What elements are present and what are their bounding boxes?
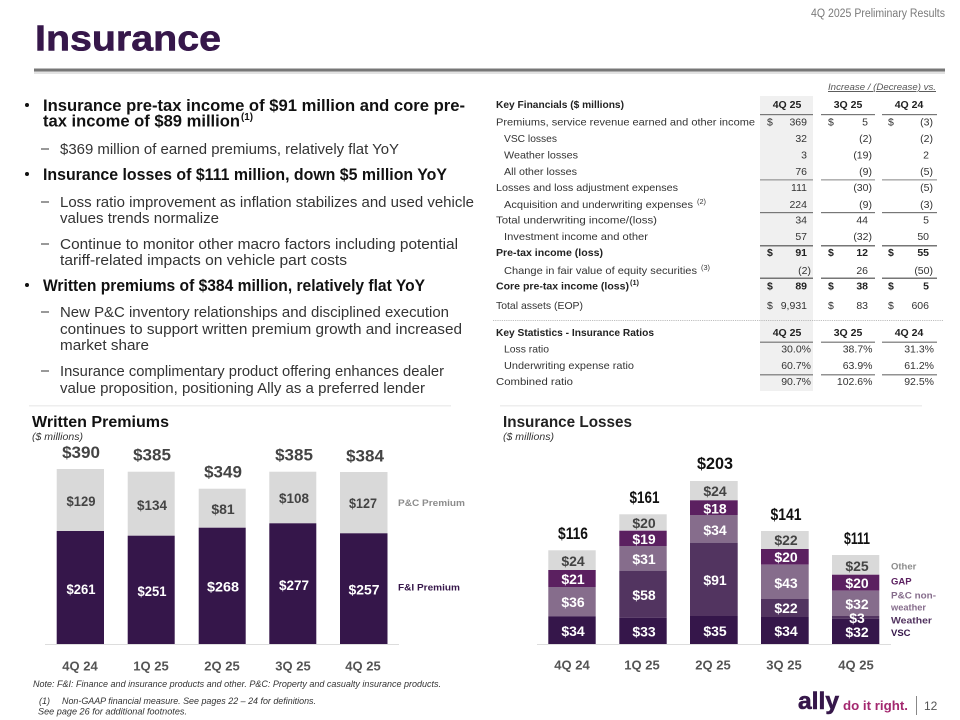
totals: $116 — [558, 525, 588, 543]
table: 4Q 24 change values: (50) — [914, 265, 933, 277]
bars: weather — [619, 543, 879, 619]
table: key financials header: 4Q 24 — [895, 99, 923, 111]
table: insurance ratios: 92.5% — [904, 376, 934, 388]
table: row labels: (1) — [630, 278, 639, 287]
legend labels: Weather — [891, 616, 932, 626]
totals: $349 — [204, 462, 242, 482]
page number: 12 — [924, 699, 938, 713]
table: 3Q 25 change values: 5 — [862, 116, 868, 128]
F&I values: $251 — [138, 583, 167, 599]
footnotes: Note: F&I: Finance and insurance products and other. P&C: Property and casualty insurance products. — [33, 679, 441, 689]
totals: $111 — [844, 530, 870, 548]
table: row labels: Acquisition and underwriting expenses — [504, 199, 693, 211]
table: key statistics header: 4Q 25 — [773, 327, 801, 339]
segment values: $34 — [774, 623, 798, 639]
bullet: pre-tax income — [25, 96, 465, 130]
x axis labels: 3Q 25 — [275, 658, 311, 674]
table: 4Q 25 values: 224 — [789, 199, 807, 211]
x axis labels: 1Q 25 — [133, 658, 169, 674]
table: row labels: (3) — [701, 265, 710, 272]
legend labels: P&C non- — [891, 590, 936, 602]
P&C values: $108 — [279, 490, 309, 506]
table: dollar signs: $ — [767, 300, 773, 312]
logo: ally do it right — [798, 688, 908, 715]
table: 4Q 25 values — [781, 116, 811, 312]
table: row labels — [496, 116, 755, 312]
sub-bullet: loss ratio: values trends normalize — [60, 211, 219, 227]
F&I values: $268 — [207, 579, 239, 595]
legend labels — [398, 498, 465, 594]
table: dollar signs: $ — [888, 280, 894, 292]
table: key financials header — [496, 99, 923, 111]
table: key statistics header: 4Q 24 — [895, 327, 923, 339]
table: dollar signs: $ — [767, 116, 773, 128]
segment values: $21 — [561, 571, 585, 587]
table: 4Q 25 values: 34 — [795, 214, 807, 226]
x axis labels: 2Q 25 — [695, 658, 731, 672]
sub-bullet: macro factors: tariff-related impacts on vehicle part costs — [60, 253, 347, 269]
table: 3Q 25 change values: 83 — [856, 300, 868, 312]
table: row labels: Losses and loss adjustment expenses — [496, 182, 678, 194]
table: row labels: Total underwriting income/(loss) — [496, 214, 657, 226]
bullet: pre-tax income: (1) — [241, 111, 253, 123]
other values: $25 — [845, 558, 869, 574]
segment values — [561, 500, 869, 640]
x axis labels: 4Q 24 — [554, 658, 590, 672]
segment values: $31 — [632, 551, 656, 567]
x axis labels: 4Q 24 — [62, 658, 98, 674]
table: insurance ratios: Loss ratio — [504, 344, 549, 356]
totals — [62, 443, 384, 482]
table: 4Q 25 values: 76 — [795, 166, 807, 178]
sub-bullet: P&C inventory: continues to support written premium growth and increased — [60, 322, 462, 338]
totals: $203 — [697, 455, 733, 473]
P&C values: $129 — [66, 493, 96, 509]
sub-bullet: macro factors: Continue to monitor other macro factors including potential — [60, 237, 458, 253]
P&C values: $81 — [211, 501, 235, 517]
segment values: $34 — [703, 522, 727, 538]
legend labels: weather — [890, 602, 926, 614]
bullet: pre-tax income: Insurance pre-tax income of $91 million and core pre- — [43, 96, 465, 115]
segment values: $33 — [632, 624, 656, 640]
segment values: $34 — [561, 623, 585, 639]
table: 4Q 24 change values: (3) — [920, 116, 933, 128]
footnotes: See page 26 for additional footnotes. — [38, 706, 187, 716]
footnotes: (1) — [39, 696, 50, 706]
segment values: $22 — [774, 600, 798, 616]
table: dollar signs: $ — [767, 280, 773, 292]
table: 4Q 25 values: 369 — [789, 116, 807, 128]
F&I values — [66, 577, 380, 599]
table: key statistics header: 3Q 25 — [834, 327, 862, 339]
table: 4Q 25 values: 9,931 — [781, 300, 807, 312]
panel: key bullet points — [25, 96, 474, 397]
table: 4Q 24 change values — [911, 116, 933, 312]
totals: $390 — [62, 443, 100, 462]
table: dollar signs: $ — [888, 116, 894, 128]
table: dollar signs: $ — [828, 280, 834, 292]
table: row labels: All other losses — [504, 166, 577, 178]
bars: GAP — [548, 500, 879, 591]
table: insurance ratios: 38.7% — [843, 344, 872, 356]
table: dollar signs: $ — [888, 247, 894, 259]
legend labels — [890, 562, 936, 639]
row lines — [760, 114, 937, 375]
footnotes — [33, 679, 441, 716]
table: insurance ratios: 102.6% — [837, 376, 872, 388]
table: dollar signs: $ — [828, 300, 834, 312]
page number — [916, 696, 938, 715]
unit note: ($ millions) — [32, 431, 83, 443]
table: dollar signs — [767, 116, 894, 312]
table: 4Q 25 values: 32 — [795, 133, 807, 145]
table: key financials header: 3Q 25 — [834, 99, 862, 111]
table: 3Q 25 change values: (9) — [859, 166, 872, 178]
sub-bullet: earned premiums: $369 million of earned premiums, relatively flat YoY — [60, 142, 399, 158]
table: insurance ratios: 61.2% — [904, 360, 934, 372]
heading: written premiums: Written Premiums — [32, 414, 169, 431]
bars: P&C non-weather — [548, 515, 879, 616]
table: key statistics header — [496, 327, 923, 339]
totals: $385 — [133, 446, 171, 464]
table: 3Q 25 change values: 38 — [856, 280, 868, 292]
F&I values: $261 — [66, 581, 96, 597]
bars: P&C premium — [57, 469, 387, 536]
x axis labels — [554, 658, 874, 672]
panel: written premiums chart — [32, 414, 465, 674]
other values: $24 — [561, 553, 585, 569]
x axis labels: 2Q 25 — [204, 658, 240, 674]
table: 4Q 24 change values: 606 — [911, 300, 929, 312]
sub-bullet: complimentary product: Insurance complimentary product offering enhances dealer — [60, 364, 444, 380]
title: Insurance — [35, 18, 221, 58]
table: row labels: Total assets (EOP) — [496, 300, 583, 312]
table: 4Q 24 change values: 2 — [923, 150, 929, 162]
F&I values: $277 — [279, 577, 309, 593]
segment values: $19 — [632, 531, 656, 547]
heading: insurance losses: Insurance Losses — [503, 414, 632, 431]
segment values: $43 — [774, 575, 798, 591]
x axis labels — [62, 658, 381, 674]
table: 4Q 24 change values: (5) — [920, 182, 933, 194]
totals: $141 — [770, 506, 802, 524]
sub-bullet: complimentary product — [41, 364, 444, 397]
sub-bullet: loss ratio — [41, 195, 474, 227]
table: key financials header: 4Q 25 — [773, 99, 801, 111]
table: dollar signs: $ — [888, 300, 894, 312]
bullet: insurance losses: Insurance losses of $111 million, down $5 million YoY — [43, 165, 448, 184]
table: row labels: Investment income and other — [504, 231, 649, 243]
P&C values: $127 — [349, 495, 377, 511]
table: dollar signs: $ — [767, 247, 773, 259]
table: insurance ratios: 31.3% — [904, 344, 934, 356]
segment values: $20 — [774, 549, 798, 565]
table: 3Q 25 change values: 44 — [856, 214, 868, 226]
table: insurance ratios: Combined ratio — [496, 376, 573, 388]
legend labels: P&C Premium — [398, 498, 465, 509]
table: insurance ratios: 30.0% — [781, 344, 811, 356]
logo: ally do it right: do it right. — [843, 699, 908, 713]
table: 4Q 25 values: 111 — [791, 182, 807, 194]
sub-bullet: complimentary product: value proposition, positioning Ally as a preferred lender — [60, 381, 425, 397]
segment values: $32 — [845, 596, 869, 612]
sub-bullet: P&C inventory — [41, 305, 462, 354]
table: 4Q 25 values: 89 — [795, 280, 807, 292]
table: 4Q 24 change values: 50 — [917, 231, 929, 243]
bullet: pre-tax income: tax income of $89 million — [43, 112, 240, 130]
table: row labels: Weather losses — [504, 150, 578, 162]
caption: increase decrease: Increase / (Decrease) vs. — [828, 82, 936, 93]
table: row labels: Change in fair value of equity securities — [504, 265, 697, 277]
segment values: $32 — [845, 624, 869, 640]
table: key financials header: Key Financials ($ millions) — [496, 99, 624, 111]
table: 4Q 25 values: (2) — [798, 265, 811, 277]
table: 4Q 24 change values: 55 — [917, 247, 929, 259]
table: 3Q 25 change values: (9) — [859, 199, 872, 211]
table: insurance ratios: 60.7% — [781, 360, 811, 372]
P&C values — [66, 490, 377, 517]
segment values: $18 — [703, 500, 727, 516]
segment values: $36 — [561, 594, 585, 610]
bars: VSC — [548, 616, 879, 644]
header: report name: 4Q 2025 Preliminary Results — [811, 8, 945, 20]
table: row labels: Premiums, service revenue earned and other income — [496, 116, 755, 128]
table: 4Q 24 change values: 5 — [923, 214, 929, 226]
panel: insurance losses chart — [503, 414, 936, 672]
sub-bullet: P&C inventory: market share — [60, 338, 149, 354]
segment values: $20 — [845, 575, 869, 591]
table: 4Q 24 change values: (3) — [920, 199, 933, 211]
table: 3Q 25 change values: (30) — [853, 182, 872, 194]
table: dollar signs: $ — [828, 247, 834, 259]
table: 4Q 24 change values: (5) — [920, 166, 933, 178]
table: 3Q 25 change values: 26 — [856, 265, 868, 277]
table: 4Q 24 change values: 5 — [923, 280, 929, 292]
table: 4Q 25 values: 91 — [795, 247, 807, 259]
x axis labels: 1Q 25 — [624, 658, 660, 672]
table: 3Q 25 change values: (2) — [859, 133, 872, 145]
sub-bullet: P&C inventory: New P&C inventory relationships and disciplined execution — [60, 305, 449, 321]
table: row labels: Core pre-tax income (loss) — [496, 280, 629, 292]
bullet: written premiums: Written premiums of $384 million, relatively flat YoY — [43, 276, 426, 295]
table: row labels: Pre-tax income (loss) — [496, 247, 603, 259]
totals: $384 — [346, 446, 384, 466]
legend labels: Other — [891, 562, 917, 572]
footnotes: Non-GAAP financial measure. See pages 22 – 24 for definitions. — [62, 696, 316, 706]
table: 4Q 24 change values: (2) — [920, 133, 933, 145]
table: 3Q 25 change values: (19) — [853, 150, 872, 162]
table: 3Q 25 change values: (32) — [853, 231, 872, 243]
table: key statistics header: Key Statistics - Insurance Ratios — [496, 327, 654, 339]
other values: $20 — [632, 515, 656, 531]
x axis labels: 3Q 25 — [766, 658, 802, 672]
segment values: $91 — [703, 572, 727, 588]
table: 3Q 25 change values: 12 — [856, 247, 868, 259]
sub-bullet: macro factors — [41, 237, 458, 269]
table: insurance ratios: 90.7% — [781, 376, 811, 388]
other values: $22 — [774, 532, 798, 548]
panel: financial tables — [493, 82, 944, 391]
table: 4Q 25 values: 3 — [801, 150, 807, 162]
table: row labels: VSC losses — [504, 133, 557, 145]
unit note: ($ millions) — [503, 431, 554, 443]
table: insurance ratios: 63.9% — [843, 360, 872, 372]
P&C values: $134 — [137, 497, 167, 513]
totals: $385 — [275, 446, 313, 464]
x axis labels: 4Q 25 — [345, 658, 381, 674]
segment values: $58 — [632, 587, 656, 603]
totals — [558, 455, 870, 548]
table: row labels: (2) — [697, 199, 706, 206]
table: 3Q 25 change values — [853, 116, 872, 312]
legend labels: F&I Premium — [398, 582, 460, 594]
F&I values: $257 — [348, 582, 380, 598]
table: insurance ratios: Underwriting expense ratio — [504, 360, 634, 372]
bars: F&I premium — [57, 523, 387, 644]
table: dollar signs: $ — [828, 116, 834, 128]
logo: ally do it right: ally — [798, 688, 840, 715]
segment values: $35 — [703, 623, 727, 639]
bars: other — [548, 481, 879, 575]
table: insurance ratios — [496, 344, 934, 388]
segment values: $3 — [849, 610, 865, 626]
legend labels: GAP — [891, 576, 912, 588]
other values — [561, 483, 869, 574]
table: 4Q 25 values: 57 — [795, 231, 807, 243]
other values: $24 — [703, 483, 727, 499]
sub-bullet: loss ratio: Loss ratio improvement as inflation stabilizes and used vehicle — [60, 195, 474, 211]
x axis labels: 4Q 25 — [838, 658, 874, 672]
totals: $161 — [630, 489, 660, 507]
legend labels: VSC — [891, 628, 911, 639]
